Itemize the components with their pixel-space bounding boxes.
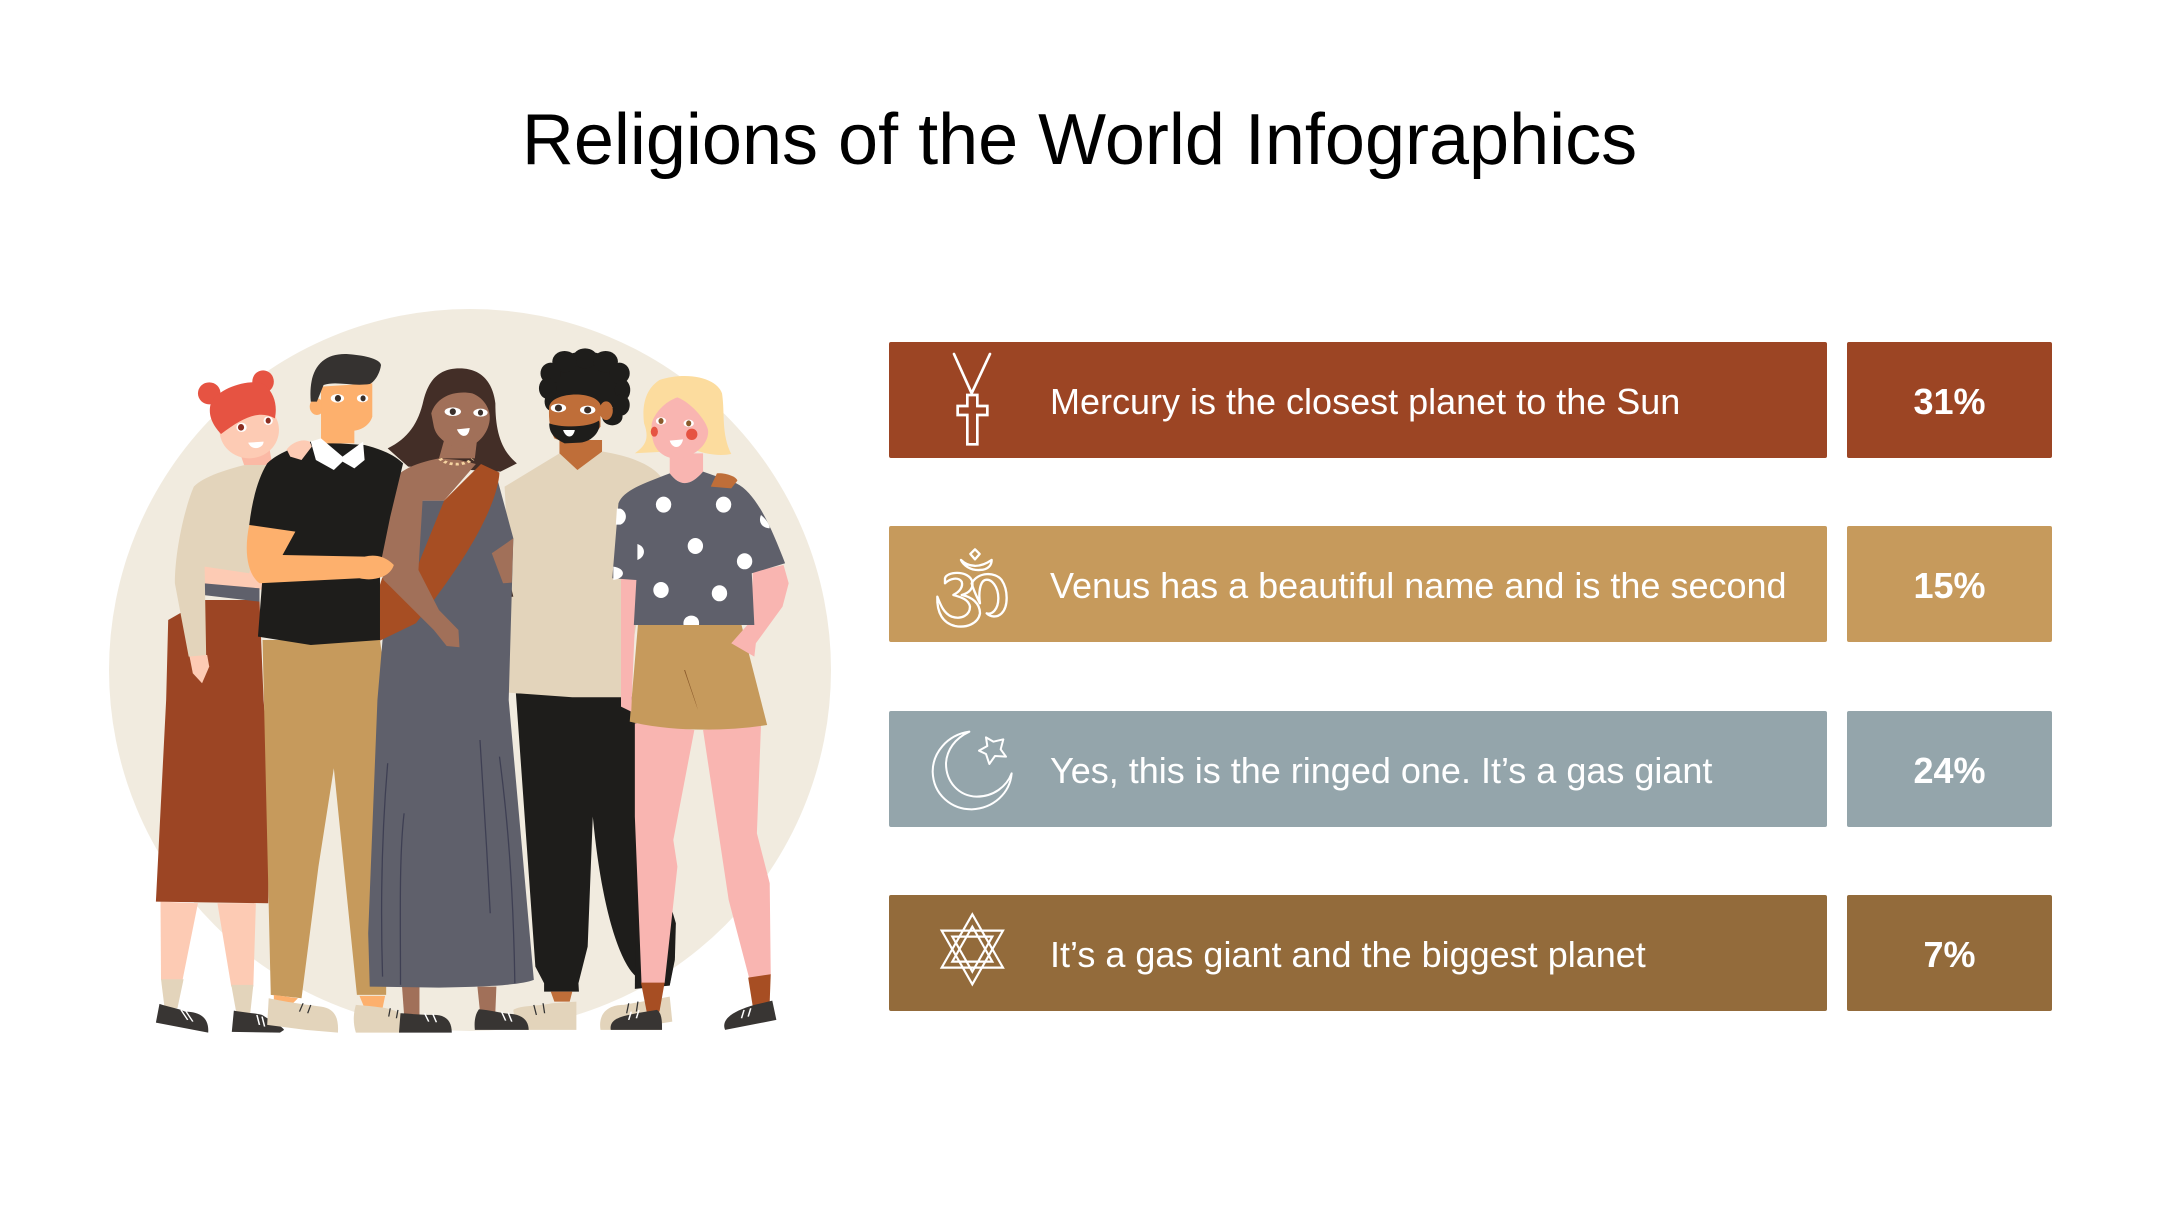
row 1: Christianity bar	[889, 342, 1827, 458]
percentage 15%: 15%	[1913, 565, 1986, 606]
text: Yes, this is the ringed one. It’s a gas giant	[1050, 750, 1712, 791]
person: man in black shirt, torso and head	[247, 354, 403, 645]
text: Mercury is the closest planet to the Sun	[1050, 381, 1680, 422]
illustration: group of five diverse people	[109, 309, 831, 1033]
person: man with afro	[505, 348, 676, 1030]
percentage 7%	[1847, 895, 2052, 1011]
row 2: Hinduism bar	[889, 526, 1827, 642]
person: woman in sari	[368, 368, 534, 1033]
percentage 15%	[1847, 526, 2052, 642]
text: It’s a gas giant and the biggest planet	[1050, 934, 1646, 975]
percentage 7%: 7%	[1923, 934, 1976, 975]
title: Religions of the World Infographics	[522, 100, 1637, 180]
percentage 31%	[1847, 342, 2052, 458]
row 3: Islam bar	[889, 711, 1827, 827]
person: man in black shirt, legs and shoes	[263, 640, 400, 1033]
text: Venus has a beautiful name and is the second	[1050, 565, 1787, 606]
person: woman with red hair	[156, 370, 284, 1033]
icon: cross necklace	[952, 352, 992, 446]
background circle	[109, 309, 831, 1031]
icon: crescent and star	[932, 730, 1013, 810]
icon: om	[936, 548, 1008, 628]
row 4: Judaism bar	[889, 895, 1827, 1011]
person: blonde woman with polka dot shirt	[611, 376, 789, 1030]
icon: star of David	[940, 912, 1005, 986]
percentage 31%: 31%	[1913, 381, 1986, 422]
percentage 24%	[1847, 711, 2052, 827]
percentage 24%: 24%	[1913, 750, 1986, 791]
